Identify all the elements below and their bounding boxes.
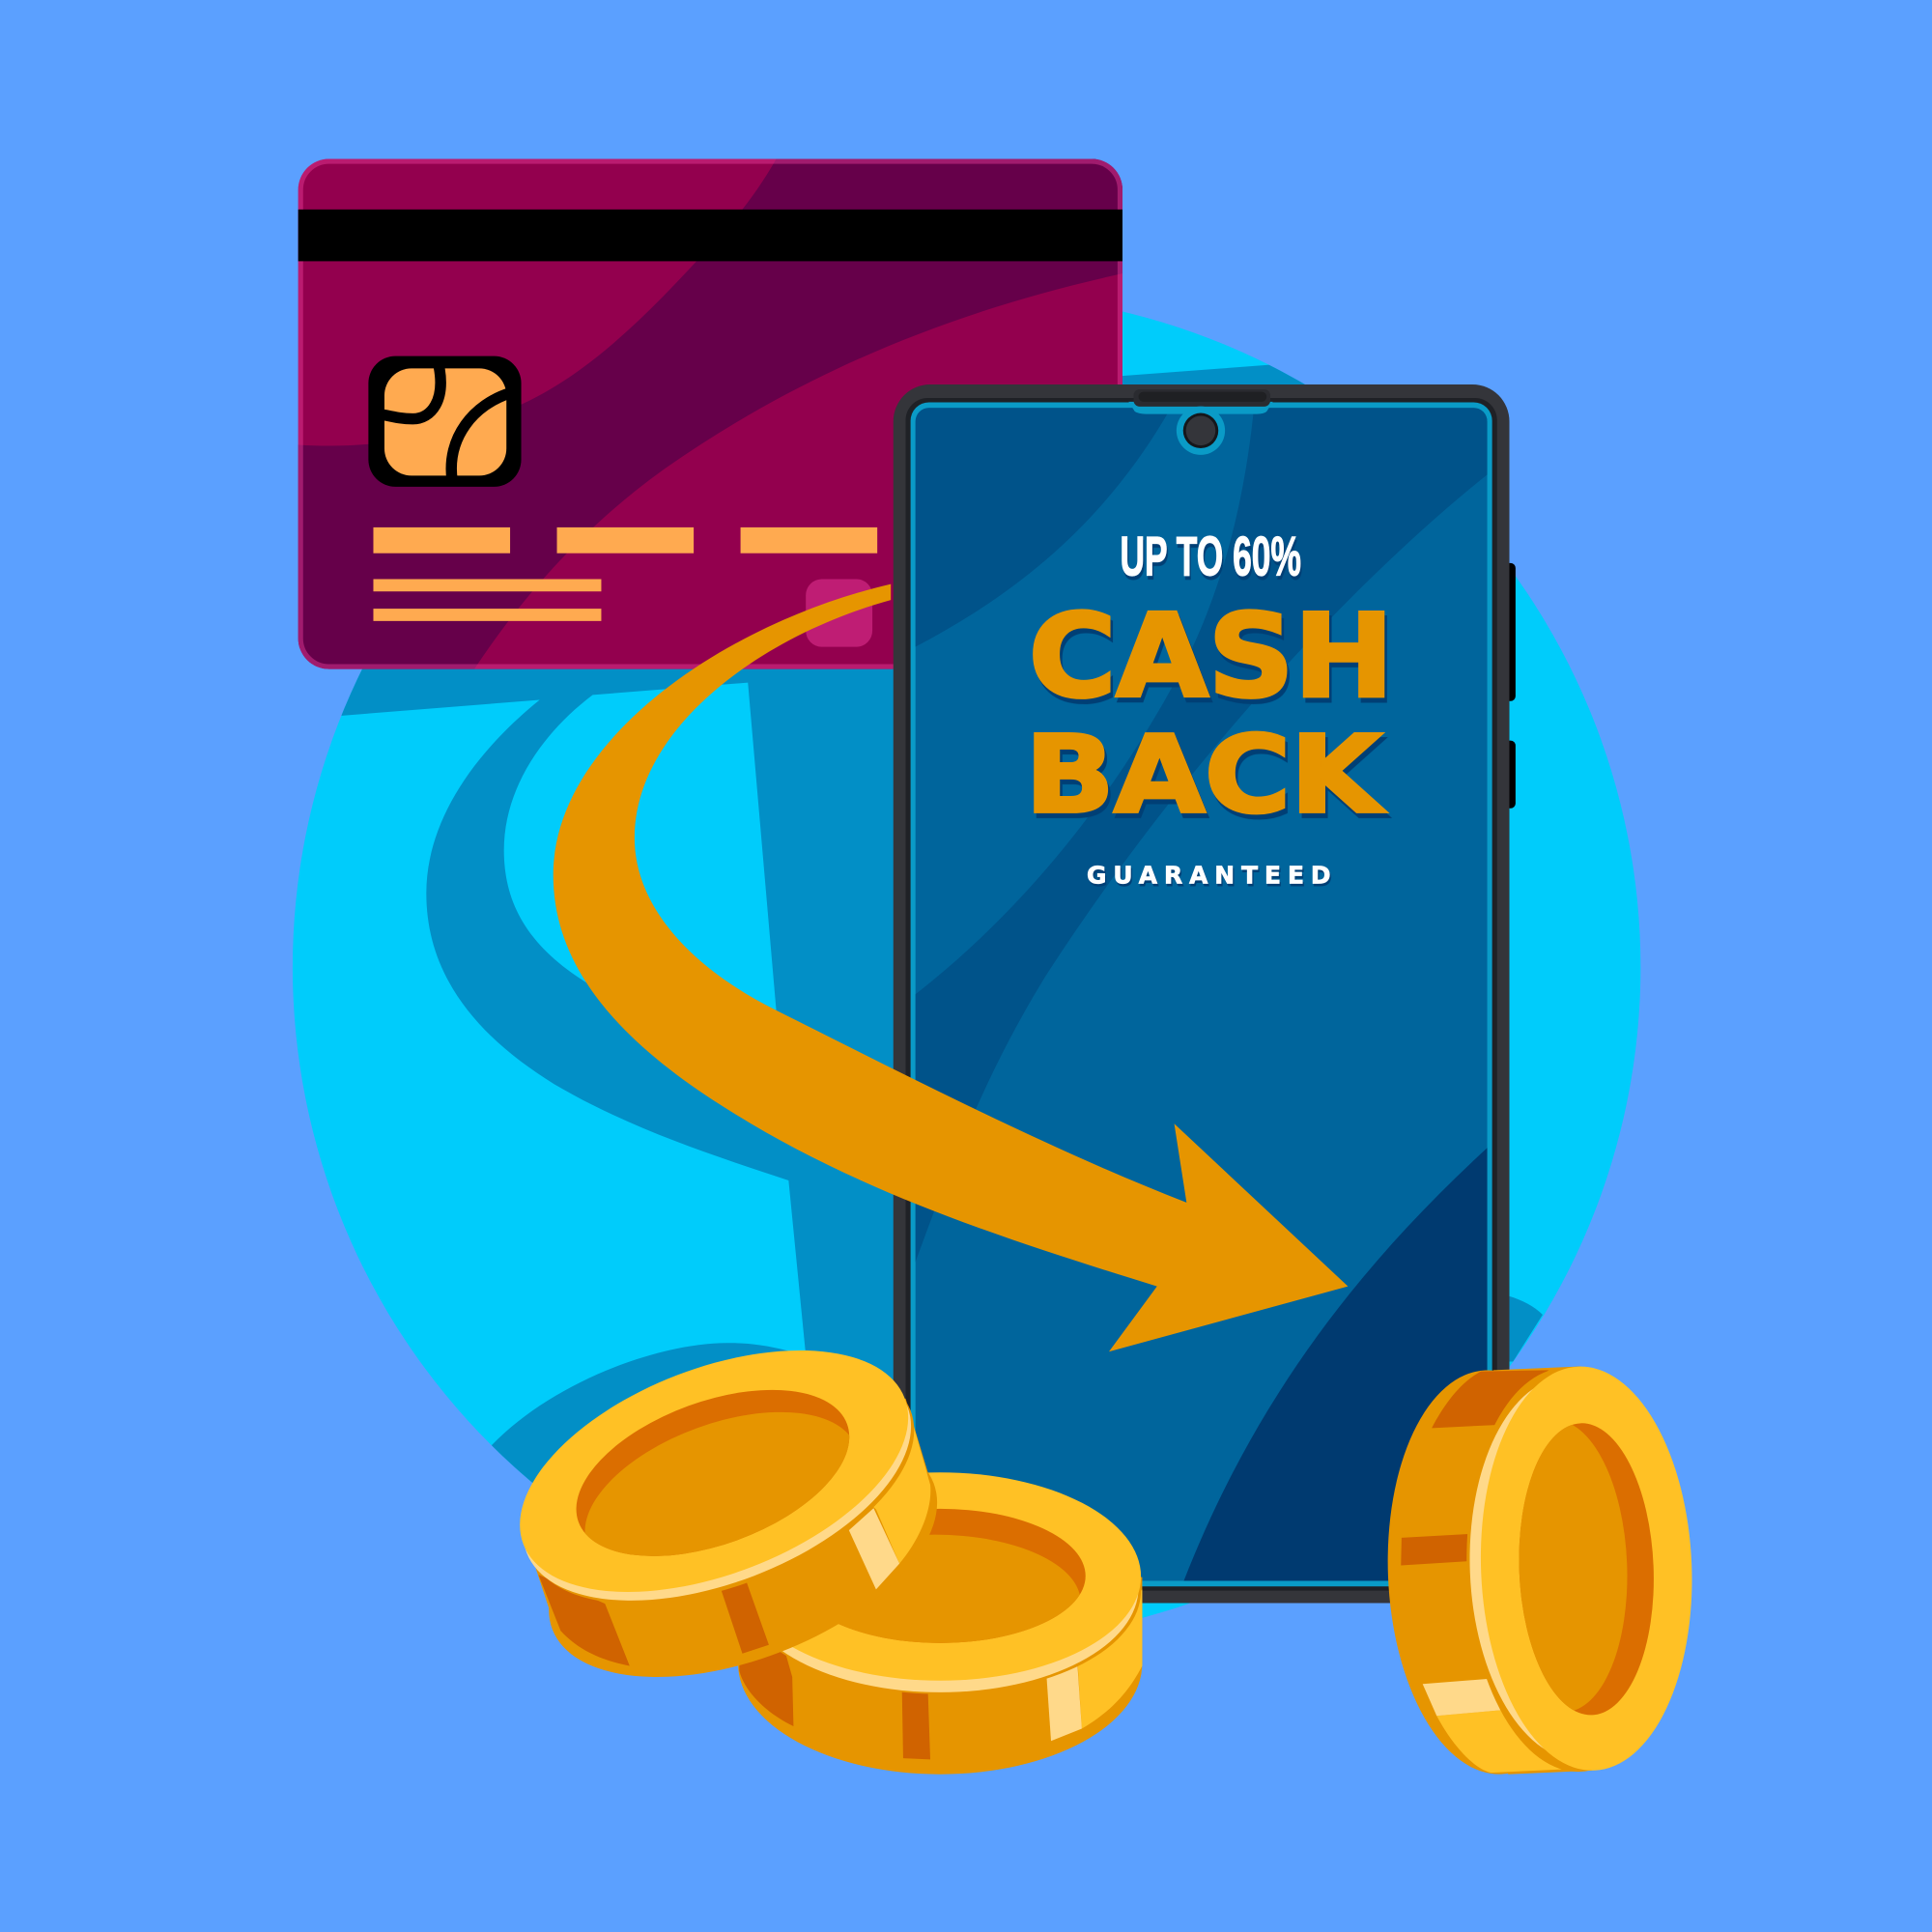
curved arrow: [554, 584, 1348, 1351]
credit card: [298, 159, 1122, 669]
background circle with swooshes: [246, 246, 1640, 1641]
front camera: [1177, 407, 1225, 455]
coin: standing on edge, right: [1380, 1362, 1699, 1778]
card border: [300, 161, 1120, 667]
phone body: [894, 384, 1509, 1603]
coin: lying flat, back: [738, 1472, 1142, 1775]
card logo square: [806, 579, 872, 647]
guaranteed text: GUARANTEED: [1087, 862, 1331, 890]
phone screen: [911, 404, 1492, 1583]
magnetic stripe: [298, 210, 1122, 261]
smartphone: [894, 384, 1516, 1603]
up to 60 percent text: UP TO 60%: [1120, 526, 1301, 588]
back heading: BACK: [1025, 713, 1385, 837]
notch and speaker: [1128, 389, 1273, 414]
card number bars: [373, 527, 877, 621]
coin: tilted, front: [520, 1350, 937, 1677]
card chip: [368, 356, 522, 487]
cash heading: CASH: [1029, 590, 1394, 724]
side buttons: [1503, 563, 1516, 809]
card dark wave: [298, 159, 1122, 669]
